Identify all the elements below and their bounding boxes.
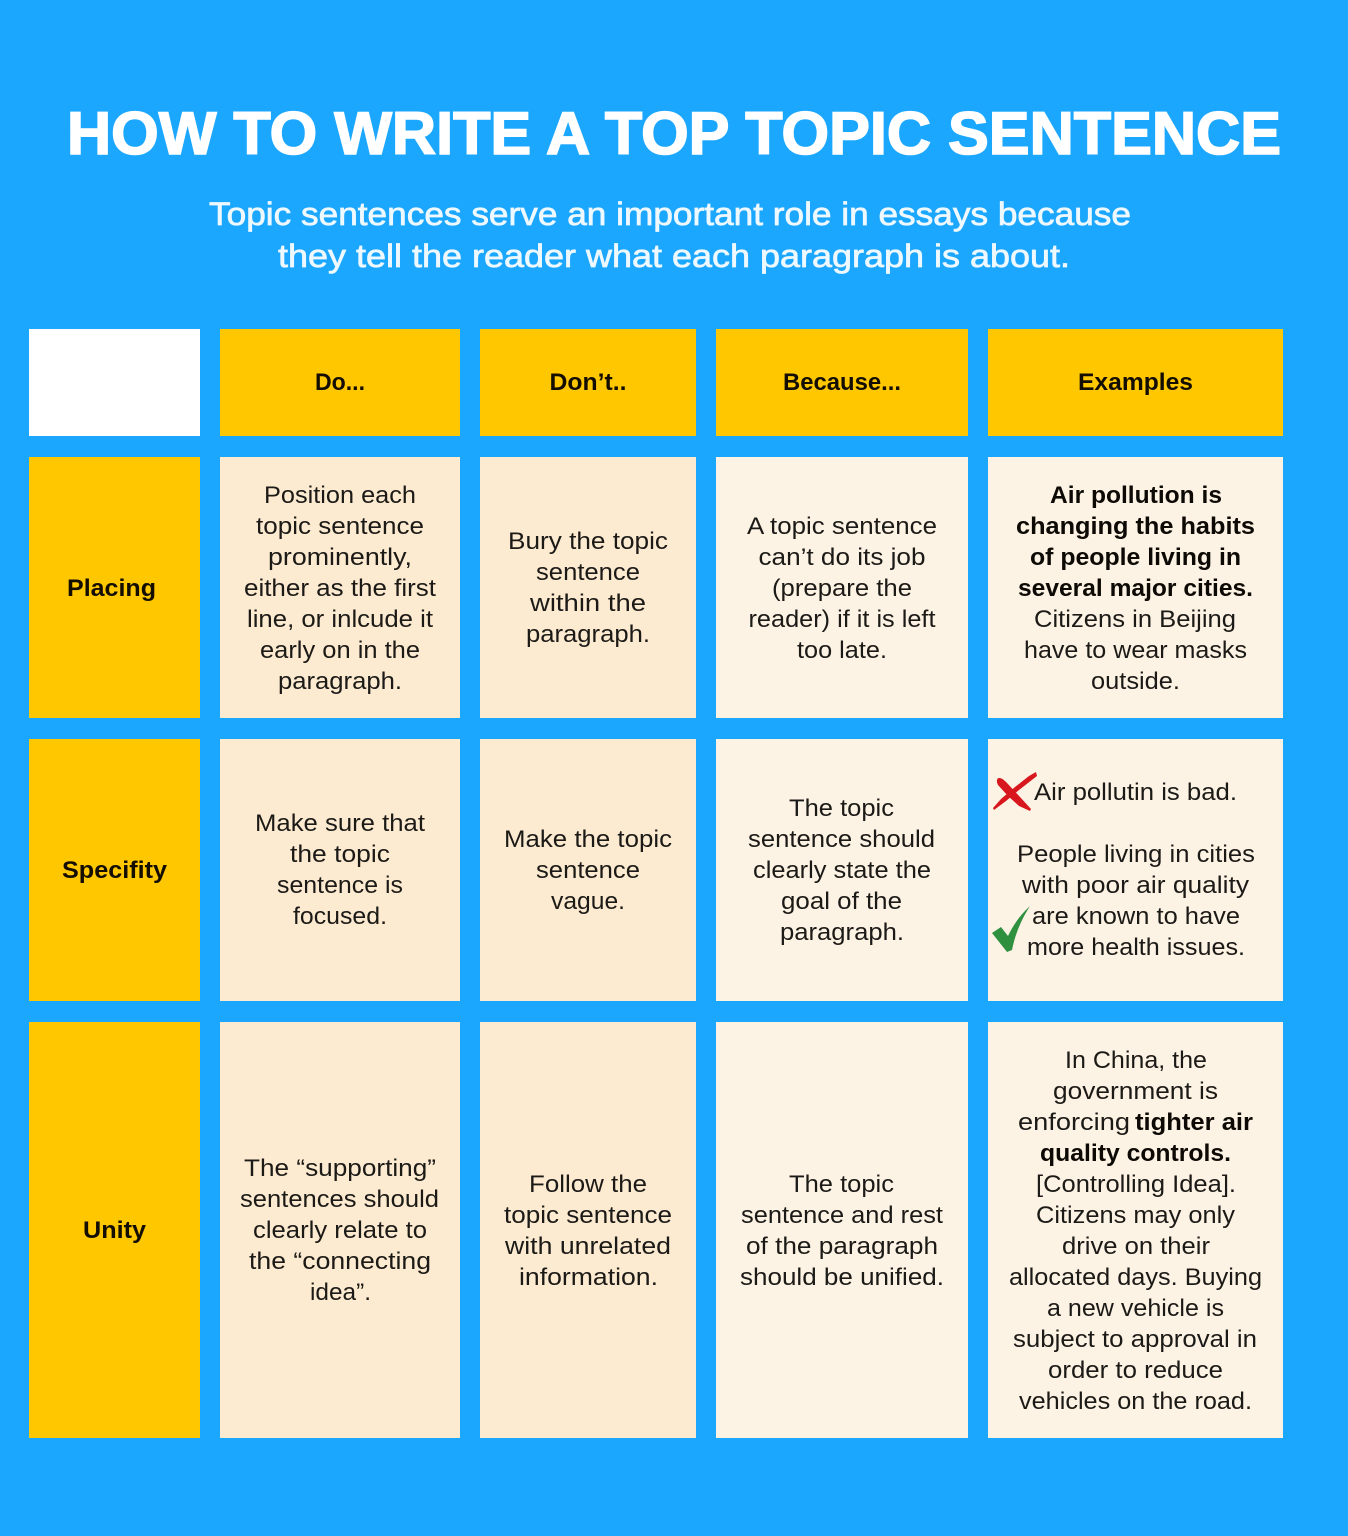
cell: placing do: line, or inlcude it (247, 606, 433, 633)
empty header cell (29, 329, 200, 436)
cell: specifity do: the topic (290, 841, 390, 868)
cell: unity examples: Citizens may only (1036, 1202, 1236, 1229)
cell: unity don't: with unrelated (504, 1233, 671, 1260)
cell: placing do: early on in the (260, 637, 420, 664)
cell: specifity don't (480, 739, 696, 1001)
cell: placing because: (prepare the (772, 575, 912, 602)
cell: placing examples (988, 457, 1283, 718)
header: examples (988, 329, 1283, 436)
row label: unity (29, 1022, 200, 1438)
cell: placing do: Position each (264, 482, 416, 509)
title: HOW TO WRITE A TOP TOPIC SENTENCE (67, 100, 1281, 167)
cell: unity don't: information. (519, 1264, 658, 1291)
cell: placing because: can’t do its job (758, 544, 926, 571)
cell: placing examples: outside. (1091, 668, 1180, 695)
cell: unity because: sentence and rest (741, 1202, 943, 1229)
cell: unity because (716, 1022, 968, 1438)
header: examples: Examples (1078, 369, 1193, 396)
cell: unity examples: [Controlling Idea]. (1036, 1171, 1236, 1198)
cell: placing don't: Bury the topic (508, 528, 668, 555)
cell: unity examples: subject to approval in (1013, 1326, 1257, 1353)
row label: placing (29, 457, 200, 718)
cell: specifity because: sentence should (748, 826, 935, 853)
header: do (220, 329, 460, 436)
cell: placing do: prominently, (268, 544, 412, 571)
icon: green check (992, 906, 1030, 952)
cell: unity because: of the paragraph (746, 1233, 938, 1260)
row label: unity: Unity (83, 1217, 147, 1244)
cell: placing do: topic sentence (256, 513, 424, 540)
cell: unity examples: drive on their (1062, 1233, 1210, 1260)
row label: placing: Placing (67, 575, 156, 602)
cell: unity do: idea”. (310, 1279, 371, 1306)
cell: placing examples: have to wear masks (1024, 637, 1247, 664)
cell: unity don't: topic sentence (504, 1202, 672, 1229)
cell: unity because: The topic (789, 1171, 894, 1198)
subtitle: they tell the reader what each paragraph is about. (278, 238, 1070, 274)
icon: red cross (993, 772, 1037, 811)
header: do: Do... (315, 369, 365, 396)
cell: unity don't: Follow the (529, 1171, 647, 1198)
header: because (716, 329, 968, 436)
cell: specifity because (716, 739, 968, 1001)
cell: unity examples: allocated days. Buying (1009, 1264, 1262, 1291)
cell: specifity do: sentence is (277, 872, 403, 899)
row label: specifity (29, 739, 200, 1001)
cell: unity examples: a new vehicle is (1047, 1295, 1224, 1322)
cell: placing don't: sentence (536, 559, 640, 586)
cell: placing don't (480, 457, 696, 718)
cell: placing because: too late. (797, 637, 887, 664)
cell: specifity examples: with poor air quality (1021, 872, 1250, 899)
cell: specifity don't: Make the topic (504, 826, 672, 853)
cell: placing examples: Air pollution is (1050, 482, 1222, 509)
cell: specifity because: goal of the (781, 888, 902, 915)
header: don't (480, 329, 696, 436)
cell: specifity do (220, 739, 460, 1001)
cell: unity don't (480, 1022, 696, 1438)
cell: specifity examples: People living in cities (1017, 841, 1255, 868)
cell: unity examples: enforcing (1018, 1109, 1130, 1136)
cell: specifity don't: vague. (551, 888, 625, 915)
cell: unity do (220, 1022, 460, 1438)
cell: unity examples: In China, the (1065, 1047, 1207, 1074)
cell: placing do: paragraph. (278, 668, 402, 695)
cell: specifity because: The topic (789, 795, 894, 822)
cell: placing examples: several major cities. (1018, 575, 1253, 602)
cell: specifity don't: sentence (536, 857, 640, 884)
cell: placing examples: Citizens in Beijing (1034, 606, 1236, 633)
cell: specifity examples: are known to have (1032, 903, 1240, 930)
cell: specifity examples: Air pollutin is bad. (1034, 779, 1237, 806)
cell: specifity do: focused. (293, 903, 387, 930)
cell: unity examples: vehicles on the road. (1019, 1388, 1252, 1415)
header: don't: Don’t.. (550, 369, 626, 396)
cell: unity do: clearly relate to (253, 1217, 427, 1244)
cell: unity examples: tighter air (1135, 1109, 1253, 1136)
cell: placing do (220, 457, 460, 718)
cell: specifity do: Make sure that (255, 810, 425, 837)
cell: placing because: A topic sentence (747, 513, 937, 540)
cell: specifity examples (988, 739, 1283, 1001)
cell: unity examples: quality controls. (1040, 1140, 1231, 1167)
cell: specifity examples: more health issues. (1027, 934, 1245, 961)
cell: placing because: reader) if it is left (748, 606, 936, 633)
cell: placing don't: paragraph. (526, 621, 650, 648)
cell: unity do: the “connecting (249, 1248, 431, 1275)
subtitle: Topic sentences serve an important role in essays because (209, 196, 1131, 232)
row label: specifity: Specifity (62, 857, 168, 884)
cell: unity examples: order to reduce (1048, 1357, 1223, 1384)
cell: unity do: The “supporting” (244, 1155, 436, 1182)
cell: placing don't: within the (529, 590, 646, 617)
cell: unity because: should be unified. (740, 1264, 944, 1291)
cell: placing because (716, 457, 968, 718)
cell: unity examples: government is (1053, 1078, 1218, 1105)
cell: specifity because: paragraph. (780, 919, 904, 946)
cell: unity examples (988, 1022, 1283, 1438)
cell: specifity because: clearly state the (753, 857, 931, 884)
cell: placing examples: of people living in (1030, 544, 1241, 571)
subtitle (209, 196, 1131, 274)
cell: placing do: either as the first (244, 575, 436, 602)
cell: unity do: sentences should (240, 1186, 439, 1213)
header: because: Because... (783, 369, 901, 396)
cell: placing examples: changing the habits (1016, 513, 1255, 540)
